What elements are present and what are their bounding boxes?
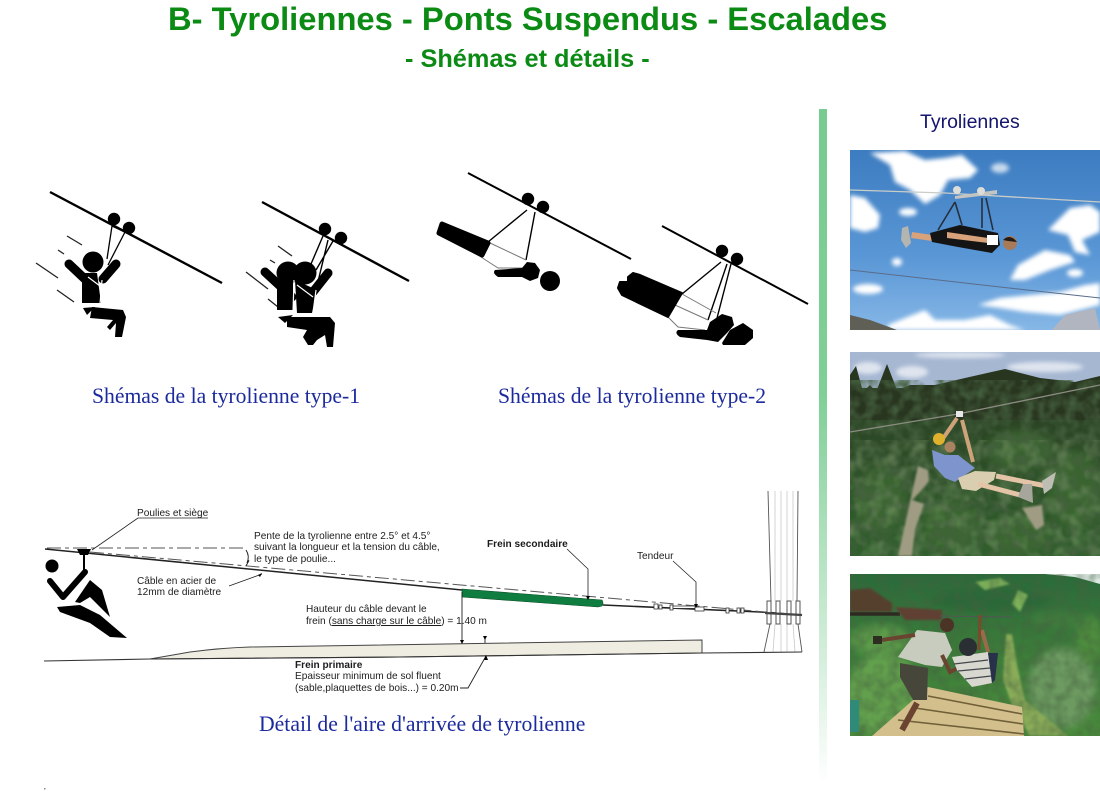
photo: riders on wooden platform bbox=[847, 574, 1100, 737]
green vertical divider bbox=[819, 109, 827, 784]
labels: Poulies et siège bbox=[137, 508, 209, 519]
leader lines bbox=[92, 518, 696, 606]
labels: Hauteur du câble devant le bbox=[306, 604, 427, 615]
labels: Tendeur bbox=[637, 551, 674, 562]
ground and fluent-soil slab bbox=[150, 640, 702, 659]
dashed reference lines bbox=[47, 547, 247, 549]
labels: Epaisseur minimum de sol fluent bbox=[295, 671, 441, 682]
photo: rider above pine forest bbox=[850, 352, 1100, 556]
labels: Câble en acier de bbox=[137, 576, 217, 587]
photo: zipline rider under blue sky bbox=[850, 150, 1100, 330]
subtitle: - Shémas et détails - bbox=[405, 45, 650, 73]
small stray mark bbox=[44, 788, 46, 790]
pictogram: tyrolienne type-1 single rider bbox=[36, 192, 222, 337]
labels: (sable,plaquettes de bois...) = 0.20m bbox=[295, 683, 459, 694]
caption: detail: Détail de l'aire d'arrivée de tyrolienne bbox=[259, 712, 585, 736]
tensioner hardware bbox=[654, 604, 744, 613]
green secondary brake bbox=[462, 589, 603, 607]
labels: Pente de la tyrolienne entre 2.5° et 4.5° bbox=[254, 531, 430, 542]
labels bbox=[137, 508, 674, 694]
labels: Frein primaire bbox=[295, 660, 363, 671]
pictogram: tyrolienne type-2 double riders bbox=[618, 226, 808, 345]
caption: type 2: Shémas de la tyrolienne type-2 bbox=[498, 384, 766, 408]
anchor tower bbox=[764, 491, 802, 652]
caption: type 1: Shémas de la tyrolienne type-1 bbox=[92, 384, 360, 408]
angle bracket bbox=[246, 550, 249, 566]
cable bbox=[45, 549, 800, 615]
labels: le type de poulie... bbox=[254, 554, 336, 565]
rider pictogram bbox=[46, 549, 127, 638]
title: B- Tyroliennes - Ponts Suspendus - Escalades bbox=[168, 0, 887, 37]
labels: suivant la longueur et la tension du câble, bbox=[254, 542, 440, 553]
pictogram: tyrolienne type-2 single rider bbox=[439, 173, 631, 291]
labels: frein (sans charge sur le câble) = 1.40 m bbox=[306, 616, 487, 627]
sidebar heading: Tyroliennes bbox=[920, 111, 1020, 133]
height arrow bbox=[460, 592, 486, 688]
pictogram: tyrolienne type-1 double riders bbox=[246, 202, 409, 347]
diagram: aire d'arrivée bbox=[44, 491, 802, 694]
labels: 12mm de diamètre bbox=[137, 587, 222, 598]
labels: Frein secondaire bbox=[487, 539, 568, 550]
